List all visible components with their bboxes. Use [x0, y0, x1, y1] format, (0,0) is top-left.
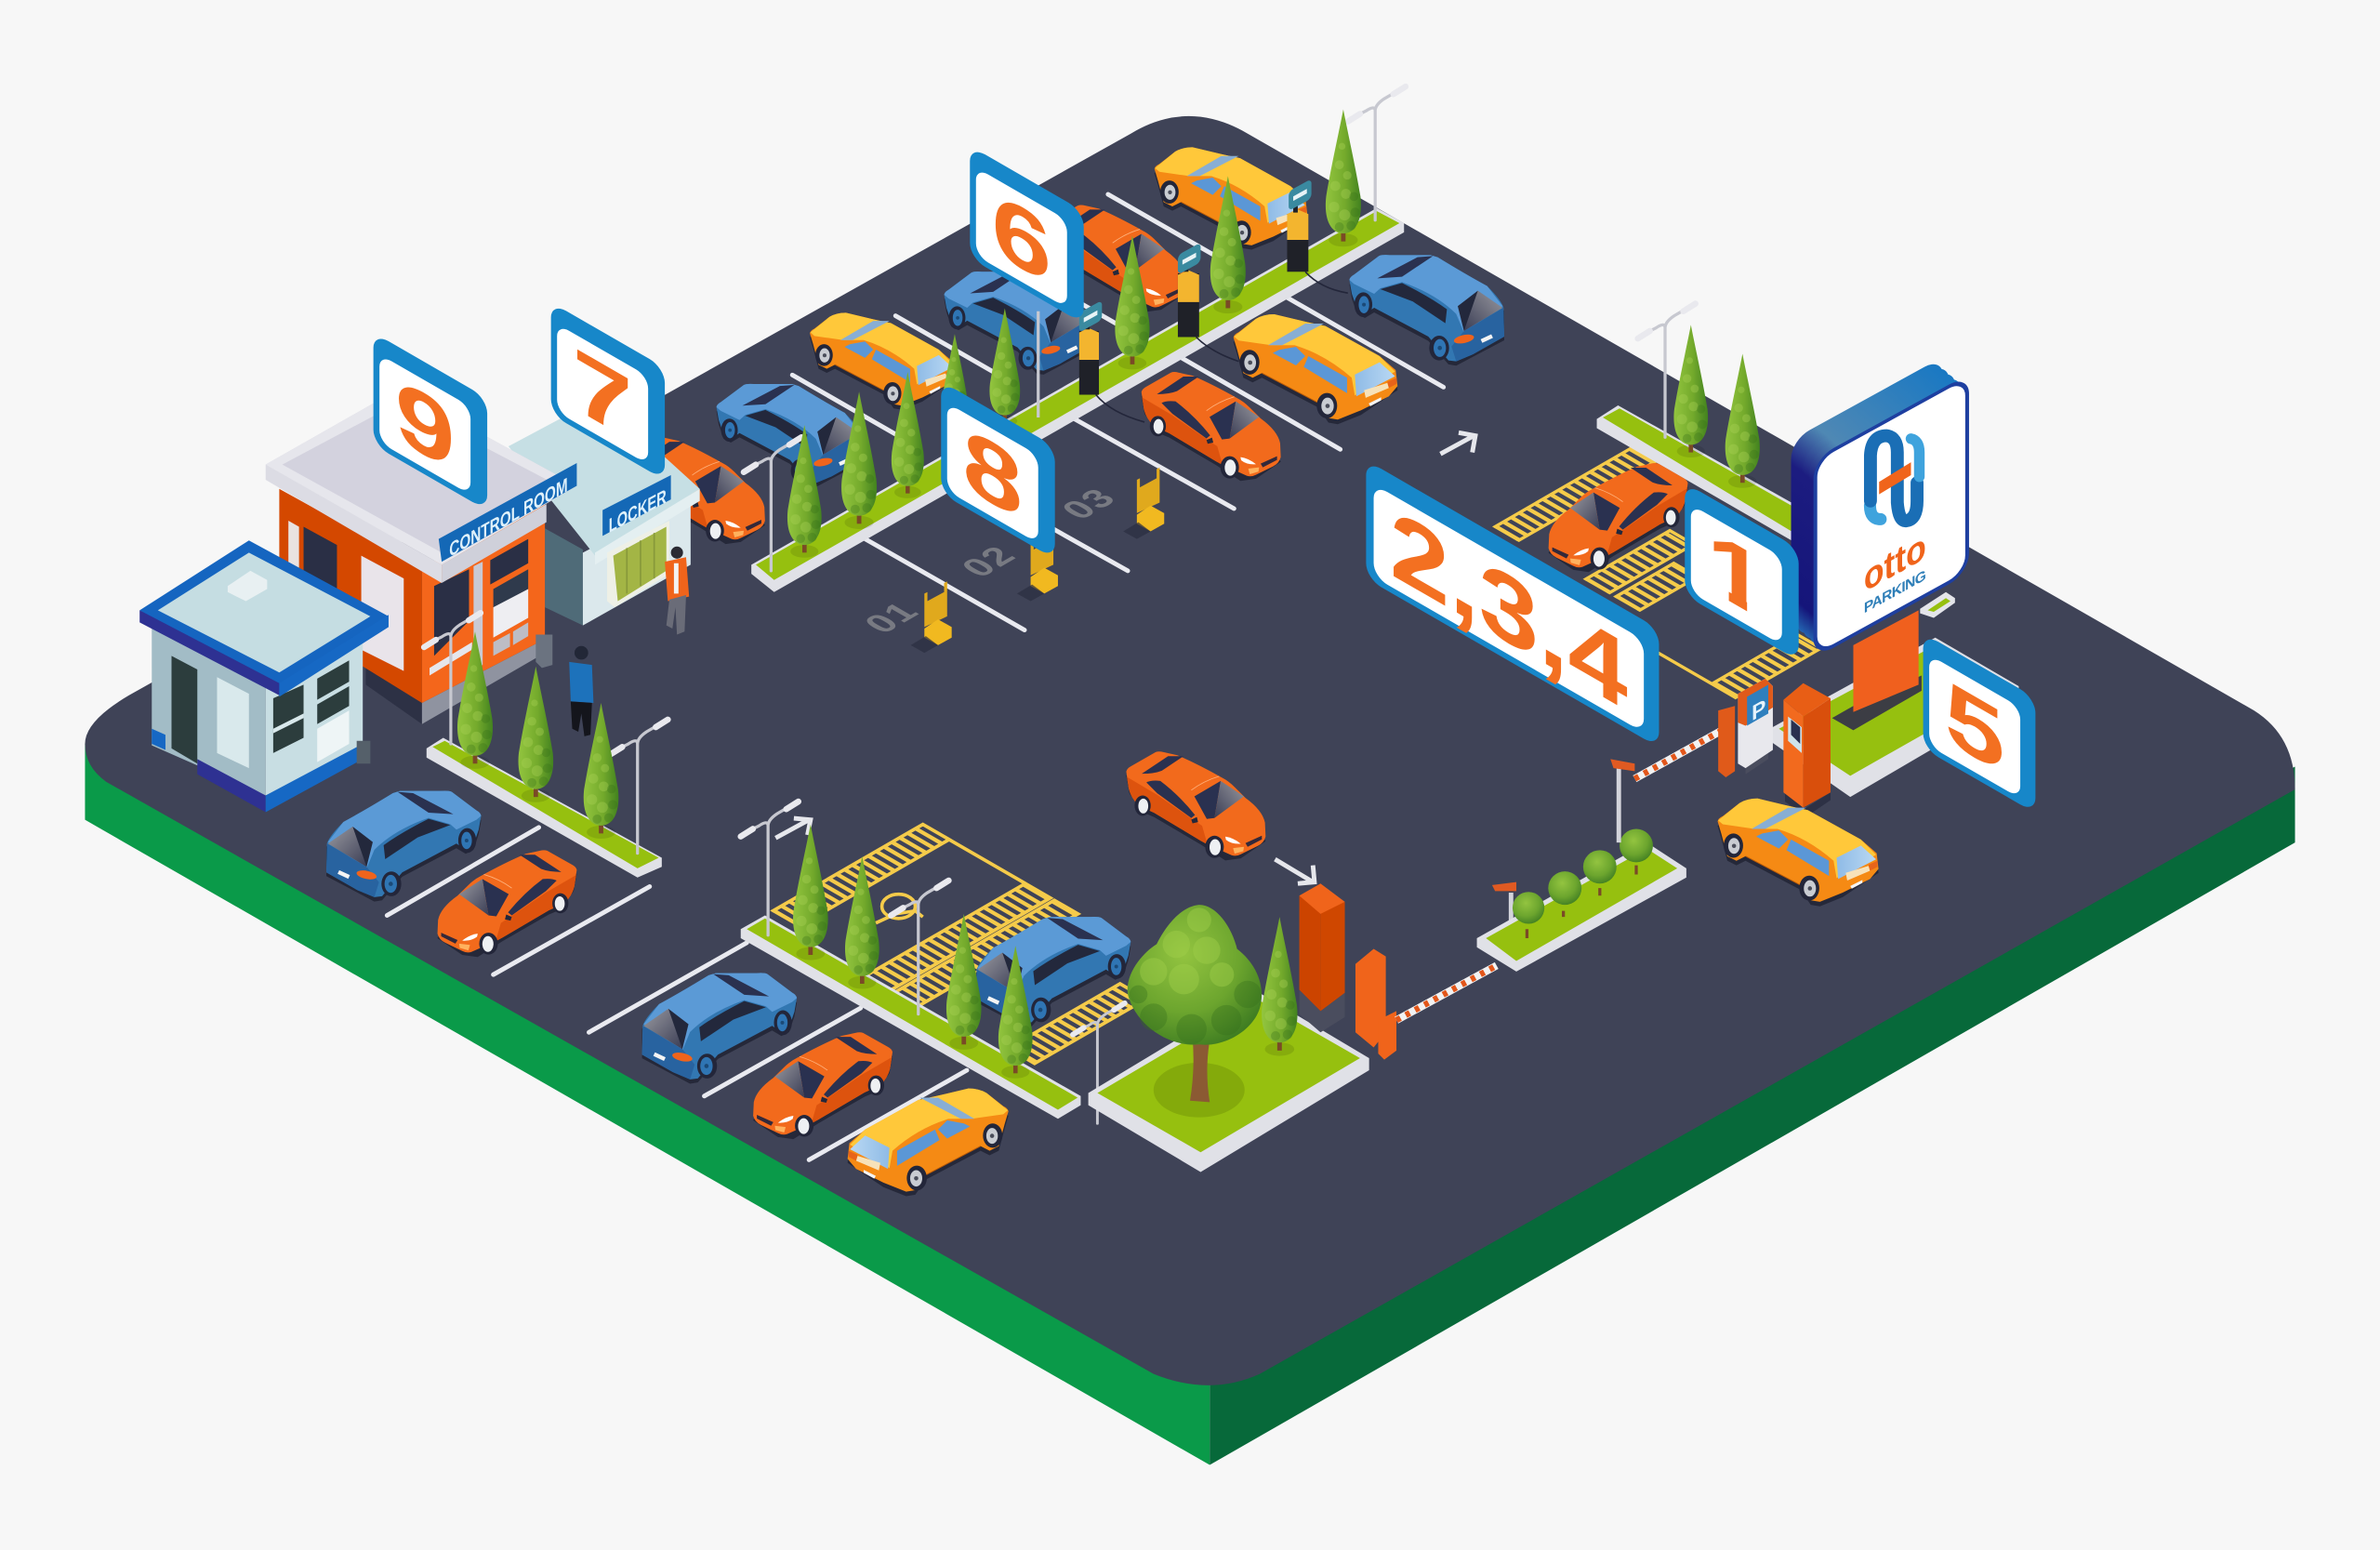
planter: top row: [751, 208, 1404, 592]
number tag 5: [1924, 633, 2035, 814]
totem pillar: [1832, 610, 1922, 730]
car: orange left lot: [438, 850, 576, 957]
car: blue near locker: [717, 384, 861, 487]
orange payment kiosk: [1783, 683, 1831, 816]
ground slab side: left: [85, 744, 1210, 1465]
lamps: bottom planter: [741, 801, 1125, 1123]
lamp: top planter left: [744, 437, 801, 571]
lamp: upper right planter: [1638, 304, 1696, 437]
number tag 5: 5: [1945, 660, 2004, 793]
painted bay numbers: [856, 484, 1126, 639]
car: orange moving: [1126, 751, 1265, 860]
tree square planter: [1089, 991, 1369, 1172]
car: blue left lot: [326, 790, 482, 902]
trash bins: [357, 634, 552, 763]
building: control room: [266, 389, 576, 724]
number tag 1: [1685, 483, 1799, 661]
car: blue behind sign 6: [945, 272, 1089, 375]
parking stoppers: [911, 468, 1164, 653]
pay station P: [1738, 679, 1773, 775]
lamps: left planter: [424, 613, 668, 854]
building: guard booth: [139, 540, 389, 813]
parking wordmark: PARKING: [1864, 566, 1926, 616]
trees: bottom planter: [793, 825, 1033, 1079]
car: yellow at entrance: [1718, 799, 1879, 907]
exit barrier rest post: [1492, 882, 1516, 965]
sign planter base: [1770, 592, 2018, 797]
sign: locker banner: [602, 475, 671, 537]
cars behind top planter: [628, 147, 1307, 544]
car: orange: [1142, 372, 1281, 481]
exit gate post: [1355, 948, 1396, 1060]
car: orange entrance lot: [1549, 463, 1688, 572]
painted bay numbers: 02: [953, 541, 1025, 583]
car: yellow wagon middle: [810, 312, 955, 410]
car: yellow bottom lot: [848, 1089, 1009, 1197]
charger cables: [1096, 272, 1348, 422]
number tag 9: [374, 333, 487, 510]
hatched zone: entrance lot: [1467, 448, 1900, 697]
ticket barrier post: [1718, 706, 1735, 777]
sign: Otto Parking totem: [1792, 357, 1967, 656]
trees: left planter: [457, 631, 618, 839]
car: orange bottom lot: [753, 1032, 892, 1139]
number tag 2,3,4: [1366, 460, 1659, 750]
shrubs: [1513, 828, 1653, 938]
lamp: top planter mid: [1037, 311, 1039, 417]
otto logo mark: [1870, 436, 1919, 521]
planter: bottom row: [741, 916, 1080, 1119]
number tag 7: 7: [573, 327, 632, 461]
painted bay numbers: 01: [856, 597, 929, 639]
trees: upper right planter: [1673, 325, 1760, 488]
car: blue on hatched zone: [976, 917, 1130, 1027]
car: blue bottom lot: [642, 973, 797, 1083]
sign: control room banner: CONTROL ROOM: [449, 472, 568, 562]
parking bay lines: [387, 194, 1444, 1159]
car: orange behind sign 6: [1049, 205, 1185, 311]
number tag 1: 1: [1707, 508, 1766, 642]
building: locker room: [509, 398, 700, 626]
ground slab side: right: [1210, 767, 2295, 1465]
sign: control room banner: [439, 463, 576, 562]
planter: left: [427, 738, 662, 878]
entrance barrier rest post: [1610, 759, 1634, 842]
entrance barrier arm: [1634, 725, 1730, 779]
shrub planter: [1477, 842, 1686, 972]
number tag 2,3,4: 2,3,4: [1390, 487, 1628, 733]
number tag 8: 8: [963, 406, 1023, 539]
person: orange vest: [665, 547, 689, 634]
trees: top planter: [787, 110, 1361, 558]
car: orange behind locker: [628, 437, 765, 544]
number tag 7: [551, 302, 665, 480]
painted bay numbers: 03: [1053, 484, 1126, 525]
cars below top planter: [1142, 255, 1504, 481]
cypress by large tree: [1262, 917, 1298, 1056]
hatched zone: bottom lot: [746, 825, 1185, 1079]
number tag 6: [970, 146, 1084, 324]
exit barrier arm: [1396, 965, 1497, 1020]
asphalt surface: [85, 116, 2295, 1385]
number tag 6: 6: [992, 171, 1051, 304]
EV charger 3: [1079, 300, 1102, 395]
exit gate kiosk: [1300, 883, 1345, 1032]
car: blue hatch: [1349, 255, 1504, 365]
lamp: top planter right: [1348, 86, 1406, 220]
EV charger 2: [1178, 243, 1200, 337]
large tree: [1128, 905, 1262, 1102]
number tag 9: 9: [395, 358, 455, 491]
accessible parking symbol: [876, 894, 923, 923]
number tag 8: [941, 381, 1055, 559]
person: blue vest: [569, 646, 593, 736]
sign: locker banner: LOCKER: [609, 484, 667, 537]
planter: upper right: [1597, 405, 1794, 542]
otto wordmark: otto: [1864, 524, 1926, 601]
car: yellow wagon: [1234, 314, 1397, 424]
pay station P: P: [1752, 696, 1765, 726]
ground arrows: [775, 432, 1475, 883]
EV charger 1: [1287, 179, 1312, 272]
car: yellow wagon top: [1155, 147, 1307, 250]
